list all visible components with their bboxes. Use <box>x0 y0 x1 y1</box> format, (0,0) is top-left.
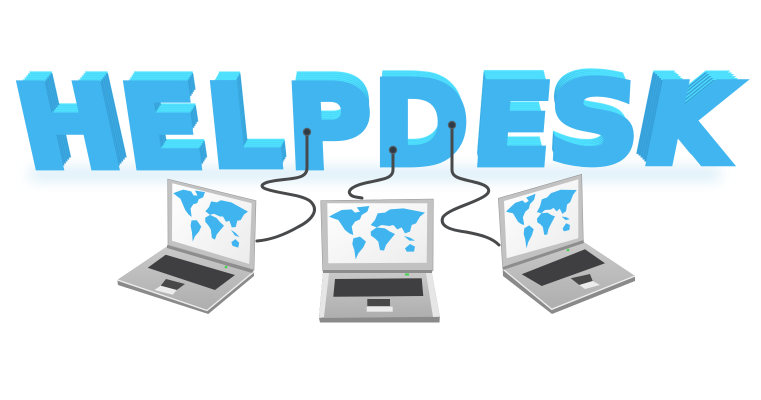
cable: right laptop to D <box>442 121 499 245</box>
title: HELPDESK 3D letters: H <box>3 60 133 195</box>
laptop: left <box>117 179 256 314</box>
cable: left laptop to P <box>257 128 314 241</box>
cable: centre laptop to D <box>349 146 397 198</box>
title: HELPDESK 3D letters: L <box>200 60 286 194</box>
title: HELPDESK 3D letters: E <box>467 59 559 192</box>
title: HELPDESK 3D letters <box>3 56 750 195</box>
title: HELPDESK 3D letters: S <box>544 57 644 190</box>
laptop: right <box>498 174 635 314</box>
title: HELPDESK 3D letters: K <box>633 60 747 190</box>
title: HELPDESK 3D letters: P <box>283 60 376 195</box>
laptop: centre <box>319 199 440 322</box>
title: HELPDESK 3D letters: E <box>112 60 212 195</box>
title: HELPDESK 3D letters: D <box>372 56 469 192</box>
